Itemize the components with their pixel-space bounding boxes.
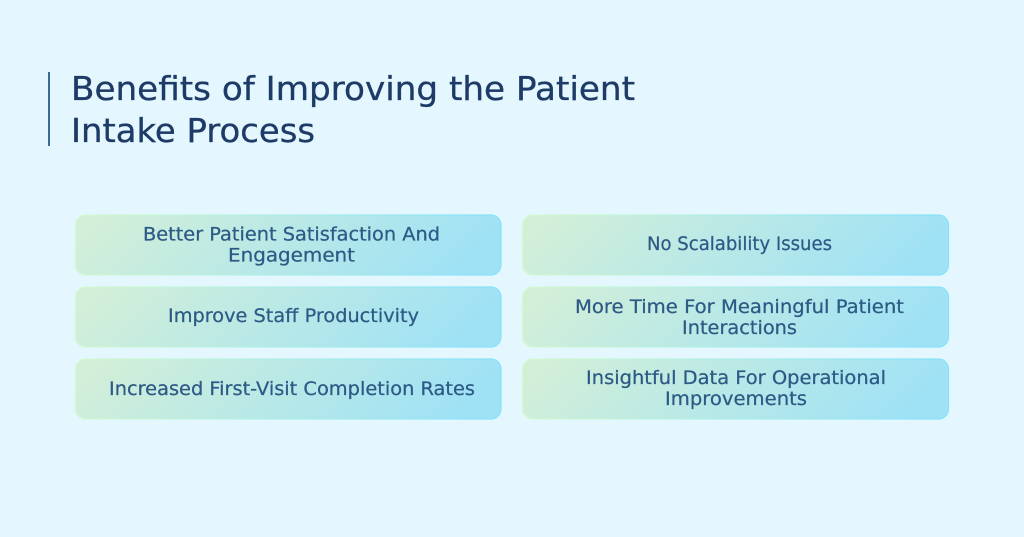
card: improve staff productivity	[76, 287, 501, 347]
title: Benefits of Improving the Patient	[71, 69, 635, 108]
card: better patient satisfaction: Better Patient Satisfaction And	[143, 224, 440, 246]
card: more time for patient interactions	[522, 287, 948, 347]
card: insightful data	[522, 359, 948, 419]
card: no scalability issues	[522, 215, 948, 275]
card: more time for patient interactions: More Time For Meaningful Patient	[575, 296, 904, 318]
card: first-visit completion rates: Increased First-Visit Completion Rates	[109, 378, 475, 400]
title: Intake Process	[71, 111, 315, 150]
card: first-visit completion rates	[76, 359, 501, 419]
card: more time for patient interactions: Interactions	[682, 317, 797, 339]
card: better patient satisfaction	[76, 215, 501, 275]
title accent bar	[48, 72, 50, 146]
card: insightful data: Insightful Data For Operational	[586, 367, 886, 389]
title block	[48, 69, 635, 150]
card: no scalability issues: No Scalability Issues	[647, 233, 832, 255]
card: improve staff productivity: Improve Staff Productivity	[168, 305, 419, 327]
card: insightful data: Improvements	[665, 388, 807, 410]
card: better patient satisfaction: Engagement	[228, 244, 355, 266]
